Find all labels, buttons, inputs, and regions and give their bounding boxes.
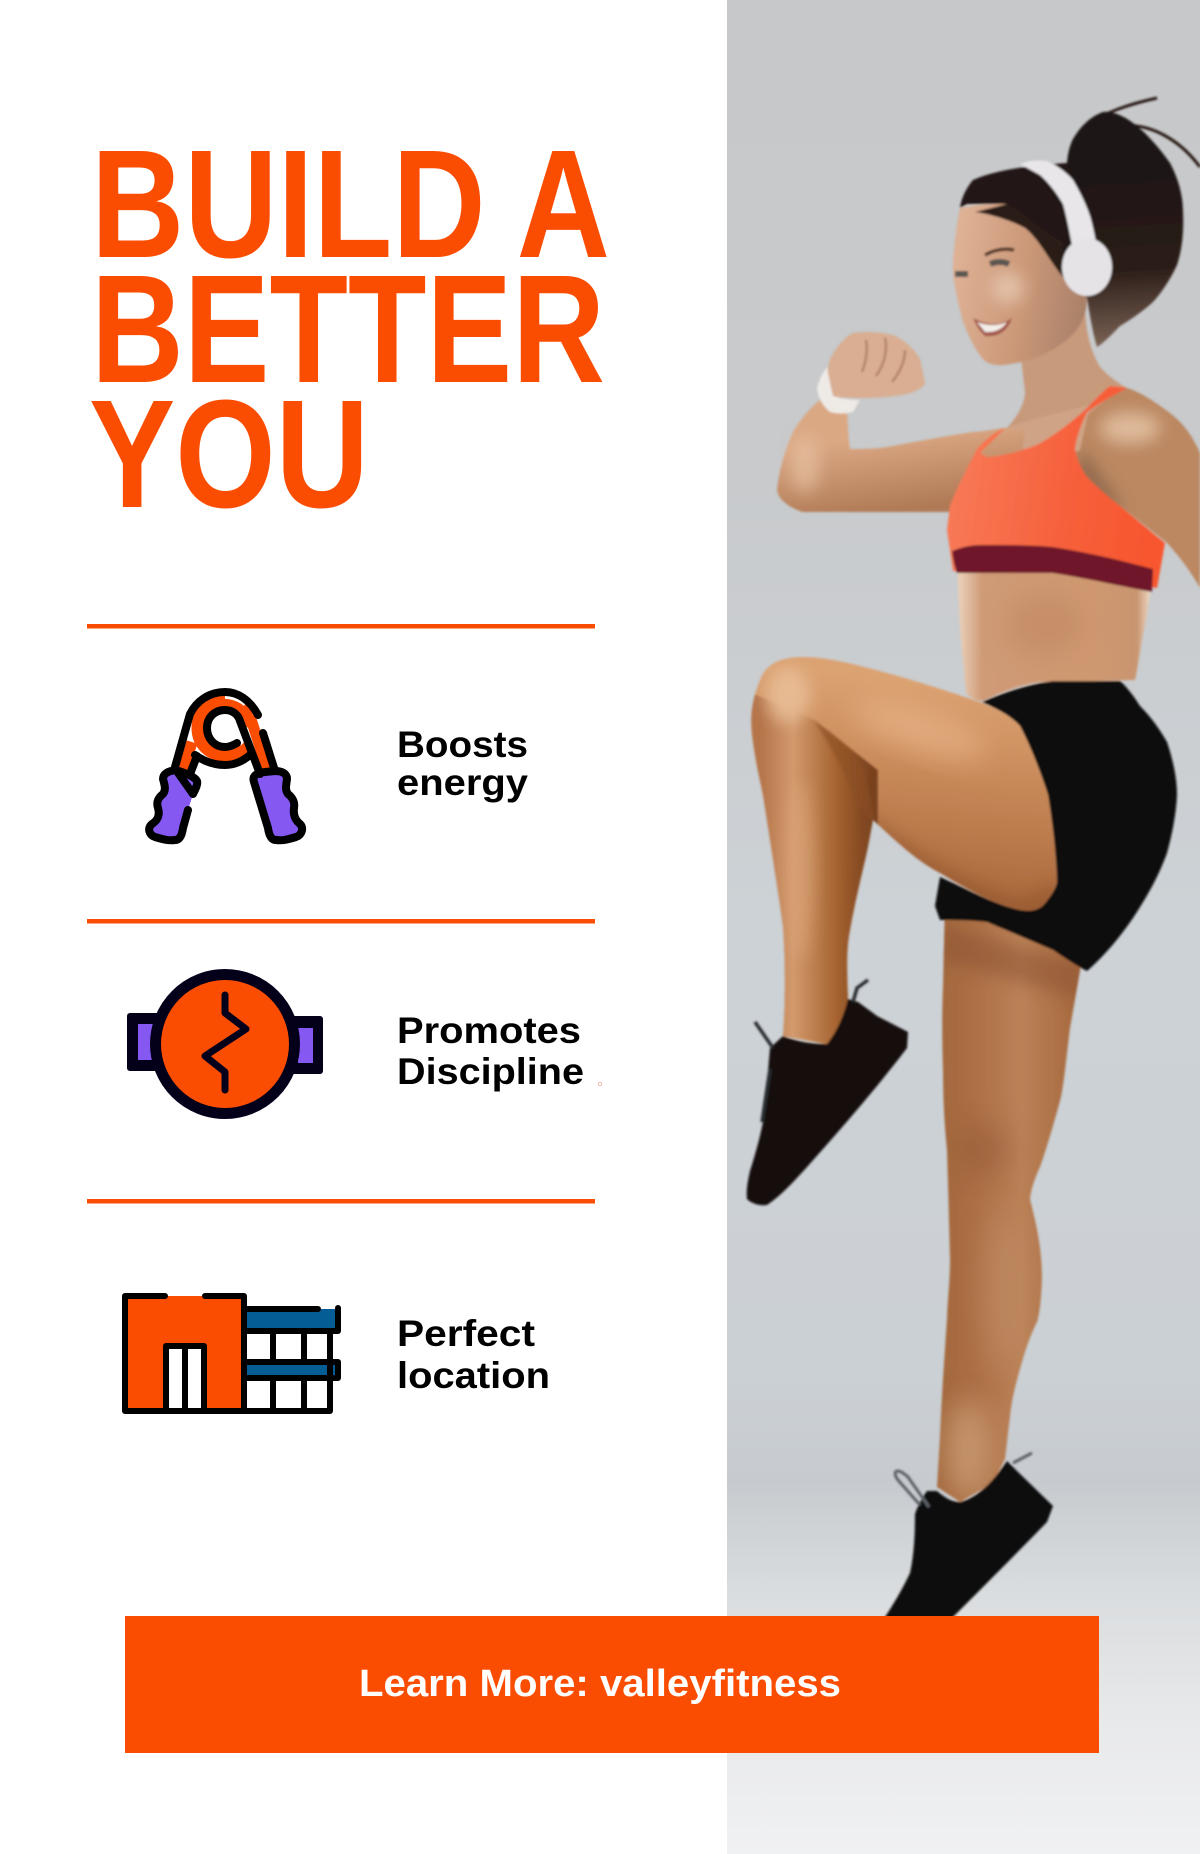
- text: boosts energy: [397, 724, 528, 803]
- icon: stopwatch: [127, 974, 323, 1114]
- neck: [1005, 300, 1127, 445]
- ponytail: [1063, 112, 1183, 347]
- divider: [87, 1199, 595, 1204]
- right strap: [289, 1016, 323, 1074]
- orange sports bra: [947, 386, 1165, 588]
- line 2: location: [397, 1355, 550, 1396]
- standing leg: [937, 900, 1085, 1502]
- icon: hand grip: [148, 692, 302, 840]
- elbow highlight: [791, 437, 819, 493]
- title line 3: YOU: [89, 368, 369, 540]
- photo backdrop: [727, 0, 1200, 1854]
- shoulder highlight: [1100, 412, 1160, 444]
- bra waistband: [952, 545, 1153, 592]
- hairline by temple: [975, 204, 1063, 277]
- small stray mark: [598, 1082, 602, 1086]
- left strap inset: [138, 1024, 153, 1060]
- standing shoe laces: [895, 1453, 1032, 1507]
- thigh highlight: [859, 698, 986, 766]
- text: perfect location: [397, 1313, 550, 1396]
- face highlight: [992, 272, 1024, 304]
- standing leg shading: [940, 925, 1085, 1500]
- face: [953, 204, 1087, 365]
- divider: [87, 919, 595, 924]
- smile: [973, 318, 1012, 336]
- standing shoe: [883, 1461, 1053, 1620]
- shin highlight: [795, 790, 817, 950]
- headphone band: [1020, 160, 1098, 255]
- right shoulder and arm: [1060, 388, 1200, 588]
- headphone cup: [1062, 238, 1112, 296]
- knee highlight: [766, 667, 810, 723]
- icon: building: [125, 1296, 338, 1411]
- abdomen: [957, 560, 1152, 701]
- calf tone: [745, 690, 878, 1050]
- left strap: [127, 1013, 161, 1071]
- raised leg shading: [745, 667, 1060, 1050]
- raised shoe laces: [755, 980, 868, 1122]
- main block: [125, 1296, 244, 1411]
- eyes: [955, 262, 1009, 274]
- left purple handle: [148, 771, 197, 840]
- upper blue band: [244, 1309, 338, 1331]
- title: [89, 118, 610, 540]
- lower blue band: [244, 1362, 338, 1378]
- eyebrow: [985, 249, 1014, 255]
- right purple handle: [253, 771, 302, 840]
- divider: [87, 624, 595, 628]
- title line 2: BETTER: [91, 243, 605, 415]
- right strap inset: [298, 1028, 313, 1063]
- building outlines: [125, 1296, 338, 1411]
- panel: photo of athlete jumping: [727, 0, 1200, 1854]
- benefit: promotes discipline: [127, 974, 584, 1114]
- grip orange spring: [183, 700, 268, 772]
- knee fold: [816, 724, 848, 772]
- raised arm: [777, 400, 1025, 512]
- grip outlines: [149, 692, 302, 840]
- fist: [827, 332, 925, 398]
- watch face: [156, 974, 294, 1114]
- title line 1: BUILD A: [91, 118, 610, 290]
- grip orange ring: [192, 695, 258, 761]
- door: [166, 1346, 204, 1411]
- teeth: [977, 322, 1007, 332]
- line 1: Perfect: [397, 1313, 535, 1354]
- armpit shadow: [1075, 450, 1125, 512]
- line 2: energy: [397, 762, 528, 803]
- abdomen shading: [1007, 595, 1083, 655]
- knee shadow: [964, 1128, 1008, 1172]
- wristband: [817, 367, 860, 414]
- chest skin: [978, 405, 1090, 470]
- calf tone: [984, 1226, 1012, 1354]
- line 1: Promotes: [397, 1010, 581, 1051]
- athlete figure: [745, 98, 1200, 1620]
- benefit: boosts energy: [148, 692, 528, 840]
- hair top: [960, 163, 1090, 290]
- thigh underside shadow: [878, 820, 1059, 912]
- raised thigh and calf: [751, 657, 1057, 1044]
- ankle highlight: [946, 1400, 990, 1500]
- thigh shadow under shorts: [940, 925, 1085, 1000]
- banner background: [125, 1616, 1099, 1753]
- raised shoe: [747, 999, 908, 1205]
- fist knuckles: [862, 338, 905, 382]
- call to action banner: [125, 1616, 1099, 1753]
- black shorts: [935, 681, 1177, 971]
- zigzag: [205, 995, 246, 1090]
- banner text: Learn More: valleyfitness: [359, 1663, 841, 1705]
- text: promotes discipline: [397, 1010, 584, 1092]
- line 2: Discipline: [397, 1051, 584, 1092]
- line 1: Boosts: [397, 724, 528, 765]
- ponytail wisps: [1085, 98, 1200, 167]
- benefit: perfect location: [125, 1296, 550, 1411]
